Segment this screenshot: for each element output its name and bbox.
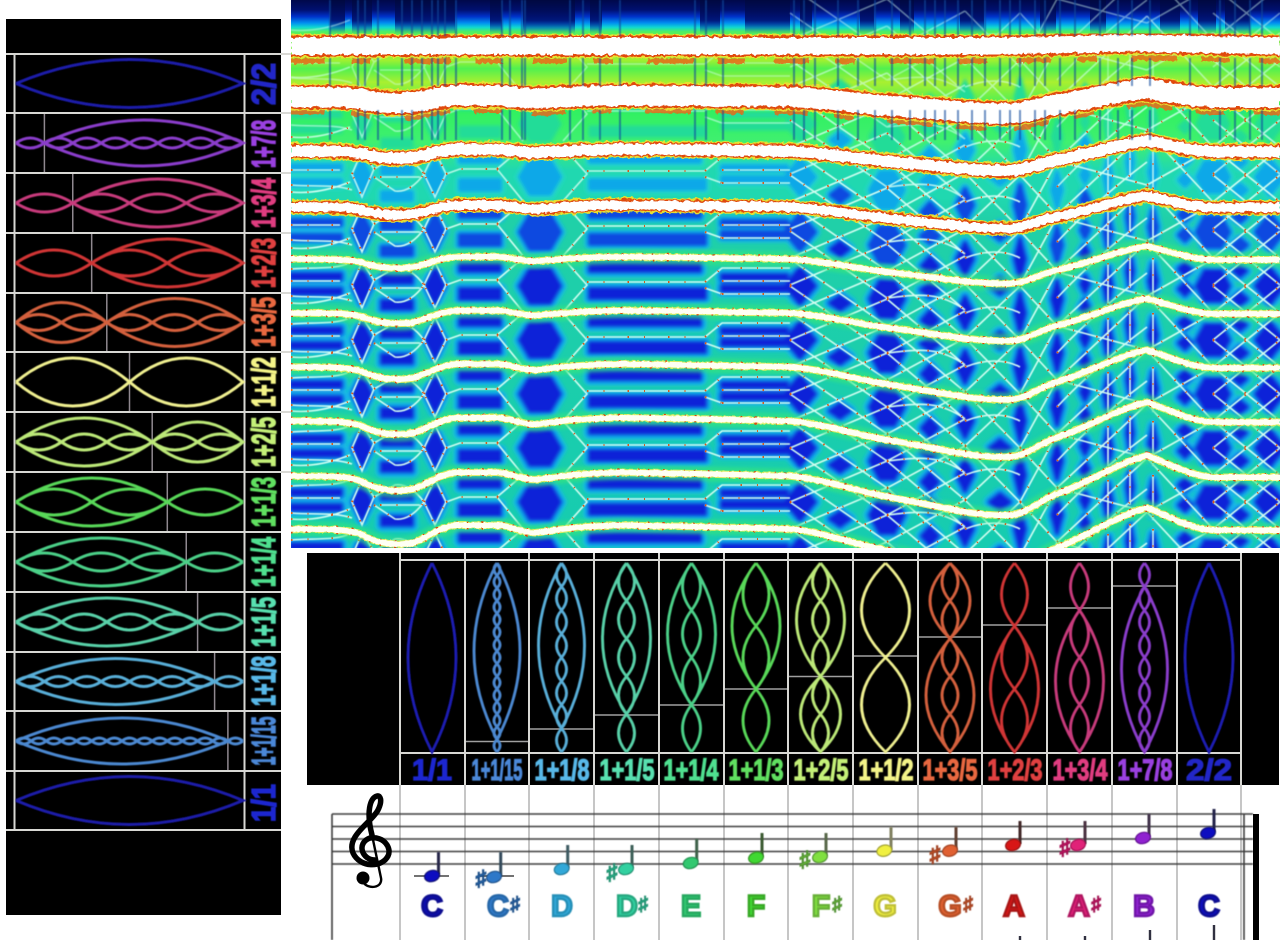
- column guides: [400, 785, 1241, 940]
- label 1+2/3: 1+2/3: [245, 238, 282, 288]
- section dividers: [466, 586, 1176, 742]
- resonance rows halo: [291, 239, 1280, 587]
- label 1+1/3: 1+1/3: [245, 477, 282, 527]
- icon: treble clef: [352, 796, 389, 887]
- wave: 1+3/5: [926, 563, 974, 752]
- letter sharps: ♯: [510, 894, 520, 915]
- blue resonance zones: [291, 77, 1280, 587]
- letter F: F: [747, 890, 765, 923]
- dark streak at 553: [550, 50, 556, 140]
- final bar: [1253, 814, 1259, 940]
- resonance row 150 core: [291, 130, 1280, 208]
- resonance row 205 core: [291, 185, 1280, 263]
- panel: vertical string harmonics: [307, 553, 1279, 787]
- label 1+1/4: 1+1/4: [664, 754, 719, 787]
- label 1+1/2: 1+1/2: [858, 754, 914, 787]
- main wavering partials: [291, 246, 1280, 570]
- partial white core: [291, 246, 1280, 570]
- band white core: [291, 43, 1280, 228]
- label 1+1/4: 1+1/4: [245, 537, 282, 587]
- letter B: B: [1133, 890, 1155, 923]
- wave diagrams: [16, 60, 243, 824]
- note C: [423, 869, 441, 883]
- note F sharp: [811, 850, 829, 864]
- note D: [553, 862, 570, 876]
- ratio labels: [412, 754, 1232, 787]
- chart: spectrogram: [291, 0, 1280, 548]
- staff sharps: ♯: [607, 861, 618, 884]
- band side patches of red: [291, 58, 1280, 128]
- label 1+7/8: 1+7/8: [1118, 754, 1172, 787]
- letter D: D: [551, 890, 573, 923]
- row grid lines: [6, 54, 305, 830]
- partial yellow fringe: [291, 246, 1280, 570]
- letter G: G: [873, 890, 897, 923]
- letter F sharp: F: [812, 890, 830, 923]
- wave: 1+3/4: [16, 179, 243, 227]
- wave: 1+1/15: [16, 718, 243, 764]
- note G sharp: [941, 843, 959, 858]
- wave: 1+1/4: [16, 538, 243, 586]
- resonance rows mid: [291, 239, 1280, 587]
- staff sharps: ♯: [1060, 836, 1071, 859]
- label 1+1/8: 1+1/8: [245, 656, 282, 706]
- staff sharps: ♯: [930, 843, 941, 866]
- band outer yellow edge: [291, 43, 1280, 228]
- next staff stems: [1020, 925, 1214, 940]
- wave: 1+1/3: [732, 563, 780, 752]
- vertical wave diagrams: [408, 563, 1233, 752]
- letter G sharp: G: [938, 890, 962, 923]
- staff sharps: ♯: [800, 848, 811, 871]
- label 1+1/3: 1+1/3: [728, 754, 784, 787]
- label 1+1/8: 1+1/8: [534, 754, 590, 787]
- letter C: C: [421, 890, 443, 923]
- green glow under main partials: [291, 246, 1280, 570]
- ledger lines: [414, 875, 514, 877]
- note B: [1134, 831, 1152, 845]
- heavy dark streaks: [1166, 20, 1174, 285]
- wave: 1+3/5: [16, 298, 243, 346]
- label 1+1/2: 1+1/2: [245, 357, 282, 407]
- wave: 1+2/5: [16, 418, 243, 466]
- wave: 1+2/3: [16, 239, 243, 287]
- wave: 1+1/2: [862, 563, 910, 752]
- section dividers: [44, 114, 228, 770]
- white saturated bands: [291, 43, 1280, 228]
- rotated ratio labels: [245, 63, 282, 822]
- note D sharp: [617, 862, 635, 876]
- letter sharps: ♯: [1091, 894, 1101, 915]
- label 1+2/3: 1+2/3: [988, 754, 1042, 787]
- letter E: E: [681, 890, 701, 923]
- resonance row 150 halo: [291, 130, 1280, 208]
- label 1+7/8: 1+7/8: [245, 120, 282, 168]
- letter sharps: ♯: [963, 894, 973, 915]
- resonance row 97: [291, 77, 1280, 155]
- red flecks on thin partials: [291, 106, 1278, 548]
- wave: 2/2: [16, 60, 243, 108]
- wave: 2/2: [1185, 563, 1233, 752]
- label 1+2/5: 1+2/5: [245, 417, 282, 467]
- wave: 1+7/8: [16, 120, 243, 166]
- panel: musical staff: [332, 785, 1259, 940]
- wave: 1+1/4: [668, 563, 716, 752]
- note A: [1004, 838, 1022, 852]
- letter A: A: [1003, 890, 1025, 923]
- note stems: [438, 809, 1214, 876]
- label 1+1/5: 1+1/5: [245, 597, 282, 647]
- label 2/2: 2/2: [245, 63, 282, 105]
- letter sharps: [510, 894, 1101, 915]
- wave: 1+1/8: [538, 563, 584, 752]
- wave: 1+1/2: [16, 358, 243, 406]
- thin crossing partials: [291, 0, 1280, 548]
- wave: 1+7/8: [1122, 563, 1168, 752]
- staff sharps: ♯: [476, 867, 487, 890]
- note heads: [423, 826, 1217, 884]
- label 1/1: 1/1: [412, 754, 452, 787]
- wave: 1+2/3: [990, 563, 1038, 752]
- resonance rows core: [291, 237, 1280, 548]
- partial red flecks: [291, 246, 1280, 570]
- wave: 1+1/3: [16, 478, 243, 526]
- band red edge: [291, 43, 1280, 228]
- dark streak at 1205: [1202, 0, 1208, 195]
- wave: 1+1/15: [474, 563, 520, 752]
- note A sharp: [1069, 838, 1087, 852]
- column grid lines: [400, 553, 1241, 785]
- resonance row 205 halo: [291, 185, 1280, 263]
- wave: 1+2/5: [796, 563, 844, 752]
- label 1+3/4: 1+3/4: [1052, 754, 1108, 787]
- letter C high: C: [1198, 890, 1220, 923]
- note C high: [1199, 826, 1217, 840]
- letter sharps: ♯: [832, 894, 842, 915]
- note F: [747, 850, 765, 865]
- label 1+3/5: 1+3/5: [245, 297, 282, 347]
- label 2/2: 2/2: [1186, 754, 1232, 787]
- label 1+3/4: 1+3/4: [245, 178, 282, 228]
- wave: 1+1/8: [16, 658, 243, 704]
- wave: 1+3/4: [1056, 563, 1104, 752]
- label 1+3/5: 1+3/5: [922, 754, 978, 787]
- letter A sharp: A: [1068, 890, 1090, 923]
- dark top columns: [330, 0, 1250, 34]
- label 1+2/5: 1+2/5: [794, 754, 848, 787]
- wave: 1+1/5: [602, 563, 650, 752]
- letter C sharp: C: [487, 890, 509, 923]
- wave: 1/1: [16, 776, 243, 824]
- wave: 1/1: [408, 563, 456, 752]
- letter D sharp: D: [616, 890, 638, 923]
- label 1+1/15: 1+1/15: [472, 754, 522, 787]
- rotated ratio labels: 1+1/15: [245, 716, 282, 766]
- letter sharps: ♯: [638, 894, 648, 915]
- vertical transient streaks: [330, 0, 1262, 140]
- label 1+1/5: 1+1/5: [600, 754, 654, 787]
- staff lines: [332, 814, 1253, 940]
- staff sharps: [476, 836, 1071, 890]
- panel: horizontal string harmonics: [6, 19, 305, 915]
- note C sharp: [485, 870, 503, 884]
- note E: [682, 856, 699, 870]
- note G: [876, 843, 893, 858]
- label 1/1: 1/1: [245, 784, 282, 822]
- wave: 1+1/5: [16, 598, 243, 646]
- note letter names: [421, 890, 1220, 923]
